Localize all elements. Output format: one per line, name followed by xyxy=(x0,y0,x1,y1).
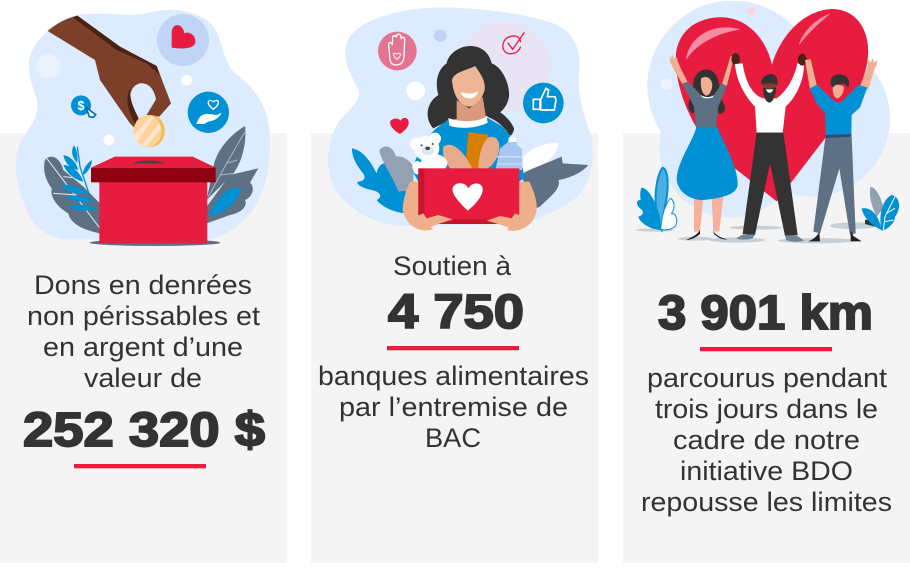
divider: food banks underline xyxy=(387,346,519,350)
text block: kilometres description: repousse les limites xyxy=(641,487,892,517)
face and neck xyxy=(457,97,487,122)
text block: donations description: valeur de xyxy=(84,363,202,393)
text block: kilometres description: parcourus pendant xyxy=(647,363,888,393)
text block: donations description: non périssables et xyxy=(27,301,261,331)
illustration: volunteer with food box xyxy=(328,7,593,231)
man centre xyxy=(735,54,807,242)
text block: kilometres description: initiative BDO xyxy=(680,456,853,486)
plant right xyxy=(870,187,883,217)
text block: donations description xyxy=(27,270,261,393)
text block: kilometres description: trois jours dans le xyxy=(655,394,878,424)
shadows xyxy=(636,228,674,232)
hands xyxy=(415,213,453,230)
text block: food banks description: par l’entremise de xyxy=(339,392,568,422)
text: Soutien à: Soutien à xyxy=(393,251,512,281)
divider: kilometres underline xyxy=(700,347,832,351)
illustration: three people and heart xyxy=(636,1,899,243)
man right xyxy=(805,58,877,241)
leaves xyxy=(352,148,410,213)
hair front lobe xyxy=(487,107,514,136)
hand xyxy=(48,16,171,132)
text block: donations description: en argent d’une xyxy=(43,332,243,362)
text block: food banks description xyxy=(318,361,589,453)
coin xyxy=(137,115,165,147)
stat: 4 750: 4 750 xyxy=(388,286,524,339)
hair xyxy=(428,46,509,128)
stat: 3 901 km: 3 901 km xyxy=(658,287,873,340)
shirt xyxy=(412,117,525,182)
box xyxy=(99,180,207,243)
panel: kilometres background xyxy=(623,133,910,563)
woman xyxy=(669,53,740,240)
box xyxy=(418,168,519,224)
shadow xyxy=(90,239,220,246)
heart xyxy=(676,9,868,201)
arms xyxy=(403,182,433,230)
text block: donations description: Dons en denrées xyxy=(34,270,252,300)
leaves behind box xyxy=(207,126,245,200)
text block: food banks description: BAC xyxy=(425,423,481,453)
illustration: donation box: $ xyxy=(77,99,85,113)
contents xyxy=(465,132,488,170)
text block: kilometres description: cadre de notre xyxy=(673,425,860,455)
plant left xyxy=(656,168,668,230)
text block: food banks description: banques alimentaires xyxy=(318,361,589,391)
panel: food banks background xyxy=(311,133,598,563)
text block: kilometres description xyxy=(641,363,892,517)
stat: 252 320 $: 252 320 $ xyxy=(23,404,265,457)
panel: donations background xyxy=(0,133,287,563)
illustration: donation box xyxy=(16,10,270,246)
divider: donations underline xyxy=(74,464,206,468)
teddy xyxy=(410,133,447,174)
